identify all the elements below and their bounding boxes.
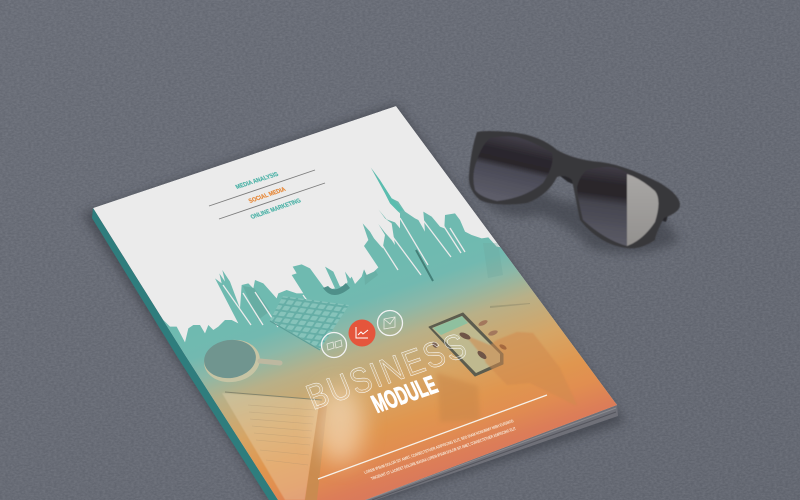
heading dividers xyxy=(209,170,325,219)
glasses frame xyxy=(469,131,680,248)
heading: social media: SOCIAL MEDIA xyxy=(247,186,287,205)
photo: calculator keyboard xyxy=(270,296,349,350)
icon: chart circle xyxy=(348,320,376,346)
left lens xyxy=(473,136,553,201)
right lens xyxy=(577,167,658,246)
footer text: LOREM IPSUM DOLOR SIT AMET, CONSECTETUER ADIPISCING ELIT, SED DIAM NONUMMY NIBH EUISMOD xyxy=(363,418,515,475)
icon row xyxy=(322,310,402,358)
faint cup arc under skyline xyxy=(323,283,350,295)
photo: right hand and fingers xyxy=(431,319,577,405)
sunglasses shadow xyxy=(468,165,680,253)
sunglasses xyxy=(469,131,680,248)
icon: mail circle xyxy=(378,310,402,336)
footer text xyxy=(363,418,517,481)
photo: left hand xyxy=(437,373,480,422)
footer text: TINCIDUNT UT LAOREET DOLORE MAGNA LOREM IPSUM DOLOR SIT AMET, CONSECTETUER ADIPISCING ELIT xyxy=(370,426,517,481)
heading: online marketing: ONLINE MARKETING xyxy=(249,198,302,221)
burj spire accent xyxy=(371,167,403,212)
photo: coffee cup xyxy=(204,340,282,382)
title: MODULE: MODULE xyxy=(367,371,442,419)
bottom divider line xyxy=(318,395,547,479)
skyline highlights: white slashes xyxy=(223,218,465,327)
temple arm xyxy=(555,172,668,222)
right lens light reflection xyxy=(627,174,658,246)
photo: smartphone xyxy=(429,313,503,376)
darker overlapping buildings xyxy=(243,286,270,320)
pen xyxy=(416,250,433,281)
book shadow xyxy=(82,104,625,500)
book cover xyxy=(90,100,630,500)
soft white glow xyxy=(316,387,364,463)
cover white background xyxy=(93,106,617,500)
cover headings list xyxy=(234,171,302,221)
title: BUSINESS: BUSINESS xyxy=(301,326,472,418)
skyline silhouette and colour gradient xyxy=(162,168,617,500)
icon: analysis circle xyxy=(322,332,346,358)
faint desk items at right xyxy=(488,243,530,308)
heading: media analysis: MEDIA ANALYSIS xyxy=(234,171,280,191)
photo: newspaper xyxy=(222,392,327,500)
book page stack edge xyxy=(92,208,618,500)
